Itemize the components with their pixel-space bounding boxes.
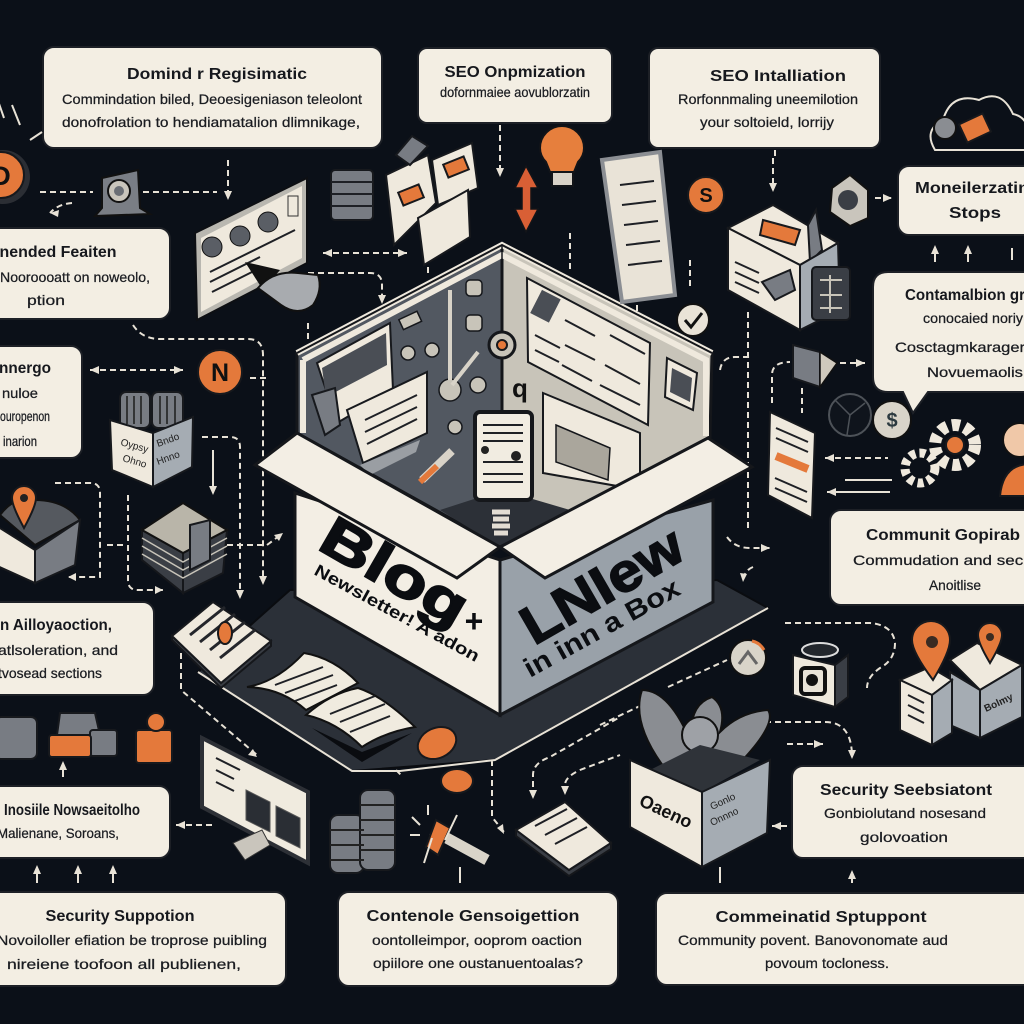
icon: browser window with cursor <box>195 178 320 320</box>
icon: left orange coin <box>0 150 30 204</box>
card: SEO installation: your soltoield, lorrijy <box>700 114 834 130</box>
interior small icons <box>399 280 486 434</box>
icon: document orange <box>768 412 815 518</box>
card: security support: nireiene toofoon all publienen, <box>7 956 241 972</box>
card: merge: nnergo <box>0 360 51 377</box>
callout: content moderation: Novuemaolis <box>927 364 1023 380</box>
left flap <box>255 433 500 578</box>
interior lower screen <box>543 393 640 490</box>
platform under box <box>198 580 768 771</box>
card: domain registration: Domind r Regisimatic <box>127 66 307 83</box>
card: merge <box>0 346 82 458</box>
card: merge: ouropenon <box>0 408 50 424</box>
card: security support <box>0 892 286 986</box>
card: content generation <box>338 892 618 986</box>
card: content generation: oontolleimpor, ooprom oaction <box>372 932 582 948</box>
left box face <box>295 493 500 715</box>
box label: new: LNIew <box>510 515 695 656</box>
icon: check circle <box>677 304 709 336</box>
icon: pin box left <box>0 486 80 583</box>
icon: small badge <box>730 640 766 676</box>
right flap <box>500 438 752 578</box>
icon: open package top right <box>728 205 850 330</box>
card: SEO optimization <box>418 48 612 123</box>
icon: labelled box left <box>110 392 193 487</box>
icon: dollar coin: $ <box>886 410 898 432</box>
icon: orange coin s: S <box>699 185 713 207</box>
card: content generation: opiilore one oustanuentoalas? <box>373 955 583 971</box>
card: extended features: ption <box>27 292 65 308</box>
icon: small monitor <box>95 170 150 216</box>
icon: cloud <box>930 96 1024 150</box>
interior left screens <box>317 323 393 423</box>
icon: gift box with feathers <box>630 690 770 867</box>
card: security sebsitiation: Gonbiolutand nosesand <box>824 805 986 821</box>
callout: content moderation: conocaied noriy <box>923 310 1023 326</box>
icon: labelled box left: Oypsy <box>119 437 149 456</box>
callout: content moderation: Cosctagmkarager <box>895 339 1024 355</box>
dashed connector arrows <box>33 125 1012 883</box>
card: domain registration: donofrolation to hendiamatalion dlimnikage, <box>62 114 360 130</box>
icon: tablet document <box>602 152 675 302</box>
card: security sebsitiation: Security Seebsiatont <box>820 782 992 799</box>
icon: pen tool <box>410 805 487 863</box>
icon: note pad <box>516 802 611 876</box>
icon: gears with person <box>905 423 1024 496</box>
card: newsletter: Malienane, Soroans, <box>0 825 119 841</box>
card: extended features <box>0 228 170 319</box>
card: SEO optimization: SEO Onpmization <box>444 64 586 81</box>
card: extended features: Nooroooatt on noweolo, <box>0 269 150 285</box>
box interior: q <box>512 373 528 403</box>
card: community: Communit Gopirab <box>866 527 1020 544</box>
card: domain registration: Commindation biled, Deoesigeniason teleolont <box>62 91 362 107</box>
card: merge: nuloe <box>2 385 38 401</box>
icon: pin boxes right <box>900 621 1022 745</box>
icon: floating cards <box>386 136 478 265</box>
card: community: Commudation and secl <box>853 552 1024 568</box>
icon: orange N badge <box>198 350 242 394</box>
card: SEO optimization: dofornmaiee aovublorzatin <box>440 84 590 100</box>
card: domain registration <box>43 47 382 148</box>
card: security support: Novoiloller efiation be troprose puibling <box>0 932 267 948</box>
icon: hexagon badge <box>830 175 868 226</box>
box interior <box>297 245 712 547</box>
icon: camera cube <box>793 643 848 707</box>
icon: labelled box left: Bndo <box>155 431 181 450</box>
card: allocation: n Ailloyaoction, <box>0 617 112 634</box>
card: SEO installation: SEO Intalliation <box>710 68 846 85</box>
card: monetization steps: Stops <box>949 205 1001 222</box>
icon: paper stack <box>142 503 227 593</box>
card: content generation: Contenole Gensoigettion <box>366 908 580 925</box>
icon: orange blocks <box>0 713 172 763</box>
icon: gift box with feathers: Oaeno <box>636 790 696 832</box>
card: allocation <box>0 602 154 695</box>
card: monetization steps <box>898 166 1024 235</box>
card: allocation: tvosead sections <box>0 665 102 681</box>
burst lines top left <box>0 95 42 140</box>
icon: coin stacks <box>330 790 395 873</box>
icon: lightbulb <box>540 126 584 186</box>
icon: red up-down arrow <box>515 166 538 232</box>
box label: plus: + <box>465 603 483 639</box>
pencil <box>422 451 452 480</box>
right box face <box>500 500 713 715</box>
icon: orange ovals <box>413 721 473 793</box>
icon: orange N badge: N <box>211 359 229 387</box>
card: newsletter <box>0 786 170 858</box>
card: community support: povoum tocloness. <box>765 955 889 971</box>
main open box <box>255 245 752 715</box>
phone <box>475 412 532 500</box>
callout: content moderation <box>873 272 1024 413</box>
icon: labelled box left: Hnno <box>155 449 182 468</box>
box label: in a box: in inn a Box <box>518 573 685 683</box>
box label: blog: Blog <box>310 504 480 638</box>
card: monetization steps: Moneilerzatin <box>915 180 1024 197</box>
card: security support: Security Suppotion <box>46 908 194 925</box>
interior big screen <box>527 278 650 425</box>
icon: labelled box left: Ohno <box>121 453 148 471</box>
icon: stacked discs top <box>331 170 373 220</box>
icon: pin boxes right: Bolmy <box>983 692 1015 715</box>
icon: orange coin s <box>688 177 724 213</box>
icon: gift box with feathers: Gonlo <box>709 791 738 813</box>
icon: dollar coin <box>873 401 911 439</box>
card: SEO installation <box>649 48 880 148</box>
card: allocation: atlsoleration, and <box>0 642 118 658</box>
icon: open book <box>247 653 415 762</box>
card: extended features: nended Feaiten <box>0 244 116 261</box>
spring <box>492 512 510 533</box>
card: community support: Commeinatid Sptuppont <box>716 909 926 926</box>
icon: globe outline <box>829 394 871 436</box>
card: newsletter: Inosiile Nowsaeitolho <box>4 802 140 819</box>
card: merge: inarion <box>3 433 37 449</box>
card: community: Anoitlise <box>929 577 981 593</box>
card: community <box>830 510 1024 605</box>
icon: keyboard <box>172 602 271 688</box>
icon: desktop monitor <box>202 738 308 863</box>
card: security sebsitiation: golovoation <box>860 829 948 845</box>
icon: device connector <box>793 345 837 387</box>
card: security sebsitiation <box>792 766 1024 858</box>
card: SEO installation: Rorfonnmaling uneemilotion <box>678 91 858 107</box>
card: community support: Community povent. Banovonomate aud <box>678 932 948 948</box>
box label: newsletter: Newsletter! A adon <box>311 561 483 666</box>
icon: gift box with feathers: Onnno <box>709 806 741 829</box>
card: community support <box>656 893 1024 985</box>
